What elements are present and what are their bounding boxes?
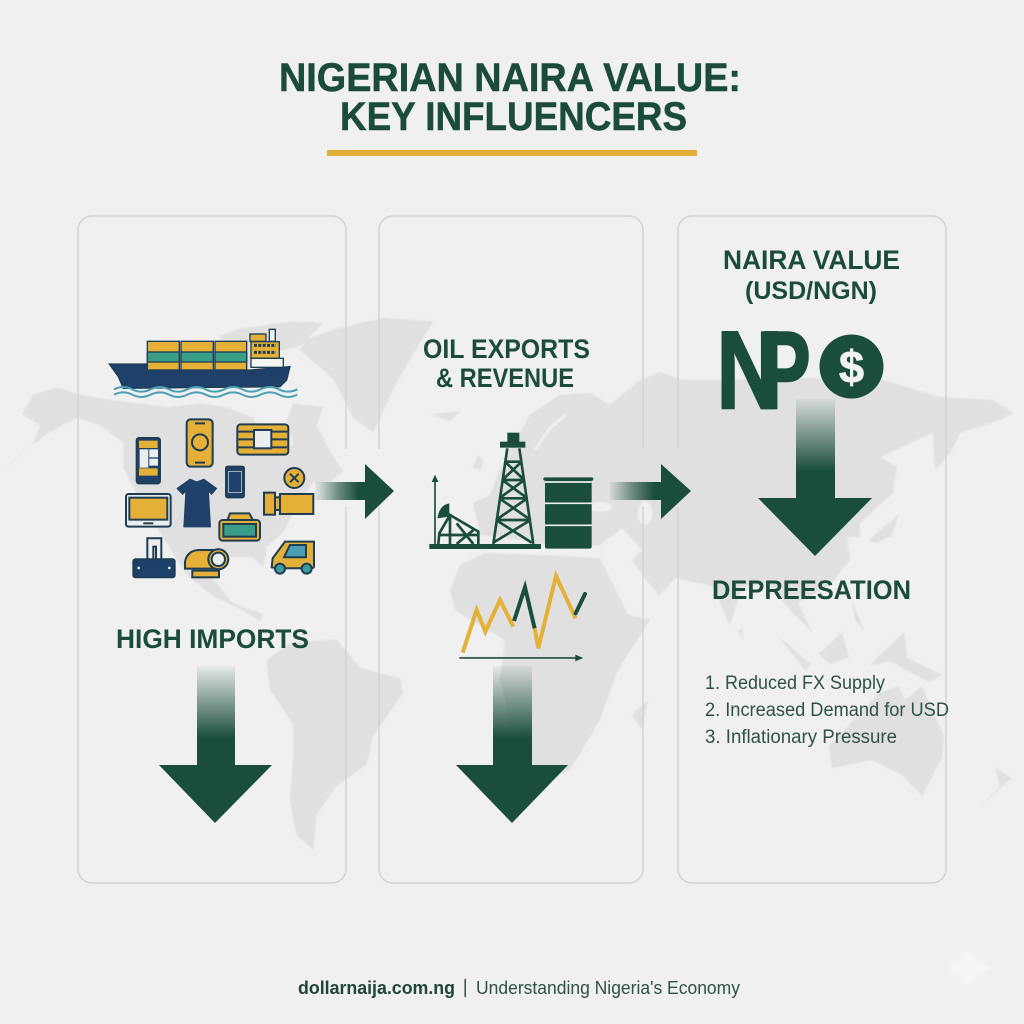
icon: oil rig, pump and barrel (429, 433, 593, 549)
title underline (327, 150, 697, 156)
panel: high imports (78, 216, 346, 883)
list: depreciation causes: 3. Inflationary Pressure (705, 727, 897, 748)
icon: container ship (109, 329, 297, 397)
list: depreciation causes: 1. Reduced FX Supply (705, 673, 885, 694)
title: NIGERIAN NAIRA VALUE: (279, 56, 741, 100)
icon: naira and dollar symbols: N (716, 308, 783, 432)
list: depreciation causes: 2. Increased Demand for USD (705, 700, 949, 721)
imported goods icons (126, 419, 314, 577)
footer: Understanding Nigeria's Economy (476, 977, 741, 998)
heading: naira value: (USD/NGN) (745, 277, 877, 305)
footer: dollarnaija.com.ng (298, 977, 455, 998)
panel: oil exports (379, 216, 643, 883)
title: KEY INFLUENCERS (340, 95, 687, 139)
arrow: oil to naira (610, 464, 691, 519)
inland seas are background-coloured shapes over the map (535, 414, 566, 450)
icon: naira and dollar symbols (716, 308, 884, 432)
heading: oil exports (423, 334, 590, 393)
heading: naira value (723, 245, 900, 305)
arrow: imports to oil (315, 464, 394, 519)
heading: oil exports: OIL EXPORTS (423, 334, 590, 364)
panel: naira value (678, 216, 949, 883)
heading: high imports: HIGH IMPORTS (116, 624, 309, 654)
list: depreciation causes (705, 673, 949, 748)
heading: naira value: NAIRA VALUE (723, 245, 900, 275)
arrow: oil revenue down (456, 666, 568, 823)
icon: naira and dollar symbols: $ (839, 342, 864, 392)
icon: sparkle (945, 944, 992, 992)
arrow: naira down (758, 399, 872, 556)
world map backdrop (5, 318, 1013, 850)
footer (298, 977, 741, 998)
title (279, 56, 741, 139)
arrow: imports down (159, 666, 272, 823)
heading: oil exports: & REVENUE (436, 363, 574, 393)
icon: naira and dollar symbols: P (756, 308, 811, 432)
heading: depreesation: DEPREESATION (712, 575, 911, 605)
chart: oil revenue line (459, 576, 585, 661)
